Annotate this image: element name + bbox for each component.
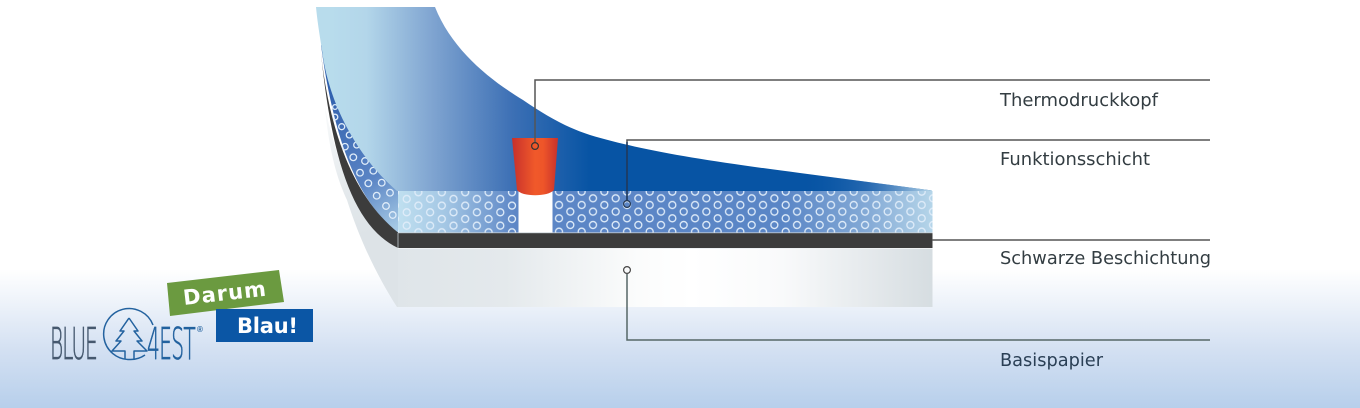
logo icon: tree in circle — [104, 309, 153, 360]
registered mark: ® — [197, 325, 203, 334]
badge: Blau! — [216, 309, 313, 342]
printed white gap — [518, 191, 552, 233]
logo text: BLUE: BLUE — [50, 319, 98, 371]
badge: Darum — [167, 270, 284, 316]
logo: BLUE4EST — [50, 309, 203, 371]
layer: base paper — [325, 108, 932, 307]
leader line: Funktionsschicht — [624, 140, 1210, 207]
label: Basispapier: Basispapier — [1000, 350, 1104, 371]
label: Thermodruckkopf: Thermodruckkopf — [999, 90, 1159, 111]
layer: functional layer with dots — [321, 45, 932, 233]
layer: blue sweep of functional layer — [316, 7, 932, 191]
leader line: Basispapier — [624, 267, 1210, 340]
layer: black coating — [320, 43, 932, 249]
badge: Darum: Darum — [182, 277, 267, 310]
badge: Blau!: Blau! — [237, 314, 298, 338]
leader line: Thermodruckkopf — [532, 80, 1210, 149]
leader line: Schwarze Beschichtung — [932, 239, 1210, 241]
thermal print head — [512, 138, 558, 195]
label: Funktionsschicht: Funktionsschicht — [1000, 149, 1150, 170]
logo text: 4EST: 4EST — [147, 319, 196, 371]
label: Schwarze Beschichtung: Schwarze Beschichtung — [1000, 248, 1211, 269]
